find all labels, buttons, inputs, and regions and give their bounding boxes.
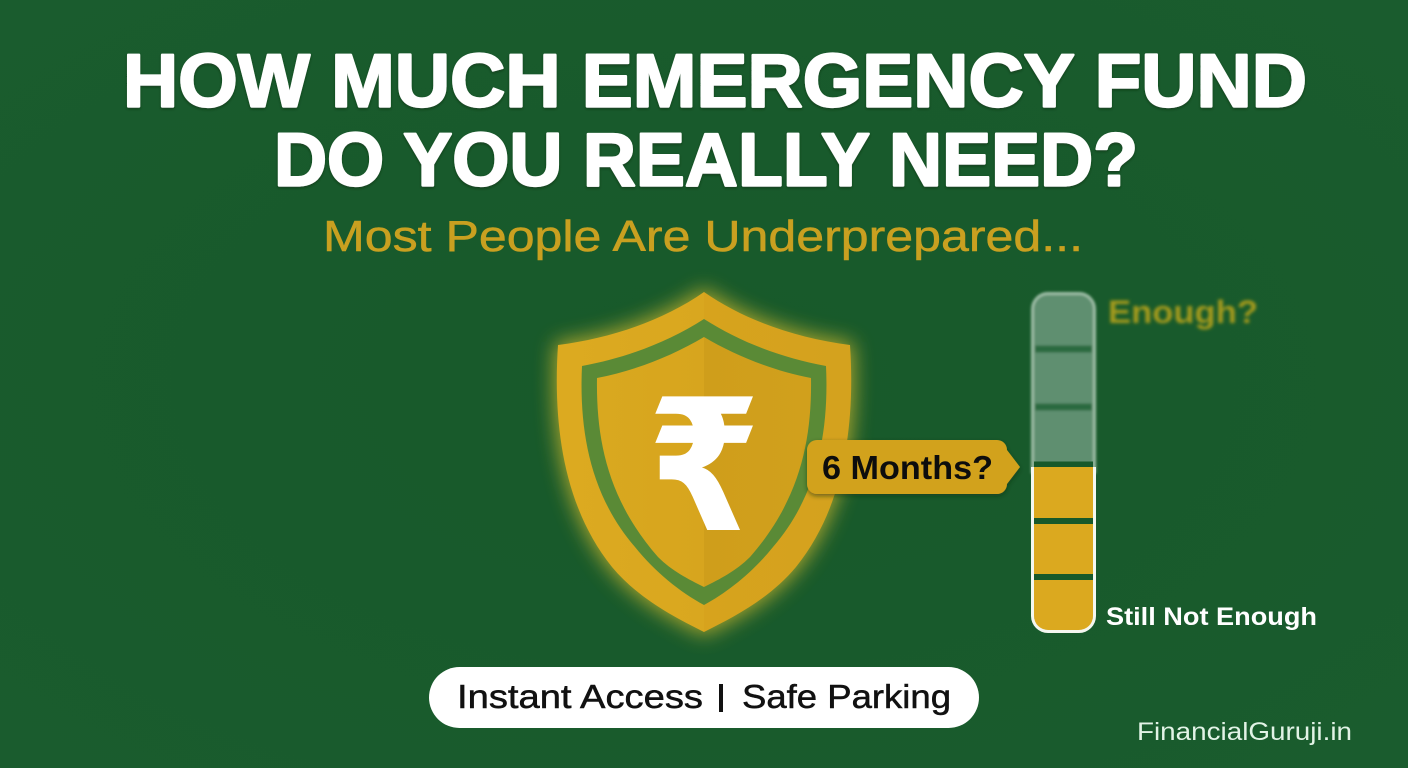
subtitle: Most People Are Underprepared... bbox=[323, 212, 1083, 261]
pill: features bbox=[429, 667, 979, 728]
label: still not enough: Still Not Enough bbox=[1106, 603, 1317, 631]
upper blurred section bbox=[1032, 294, 1094, 472]
callout: 6 months: 6 Months? bbox=[822, 449, 993, 486]
callout: 6 months bbox=[807, 440, 1020, 494]
shield glow bbox=[557, 292, 851, 632]
shield inner bbox=[597, 337, 811, 587]
label: enough: Enough? bbox=[1108, 294, 1258, 330]
title: HOW MUCH EMERGENCY FUND bbox=[123, 38, 1307, 122]
title: DO YOU REALLY NEED? bbox=[274, 118, 1138, 202]
level dividers bbox=[1034, 462, 1093, 467]
icon: rupee shield bbox=[557, 292, 851, 632]
pill: features: Instant Access bbox=[457, 678, 703, 715]
filled section bbox=[1034, 467, 1093, 630]
shield outer bbox=[557, 292, 851, 632]
gauge bar bbox=[1031, 294, 1096, 633]
shield ring bbox=[582, 319, 826, 605]
pill: features: Safe Parking bbox=[742, 678, 951, 715]
title bbox=[123, 38, 1307, 202]
footer brand: FinancialGuruji.in bbox=[1137, 718, 1352, 746]
rupee symbol: ₹ bbox=[647, 360, 761, 573]
